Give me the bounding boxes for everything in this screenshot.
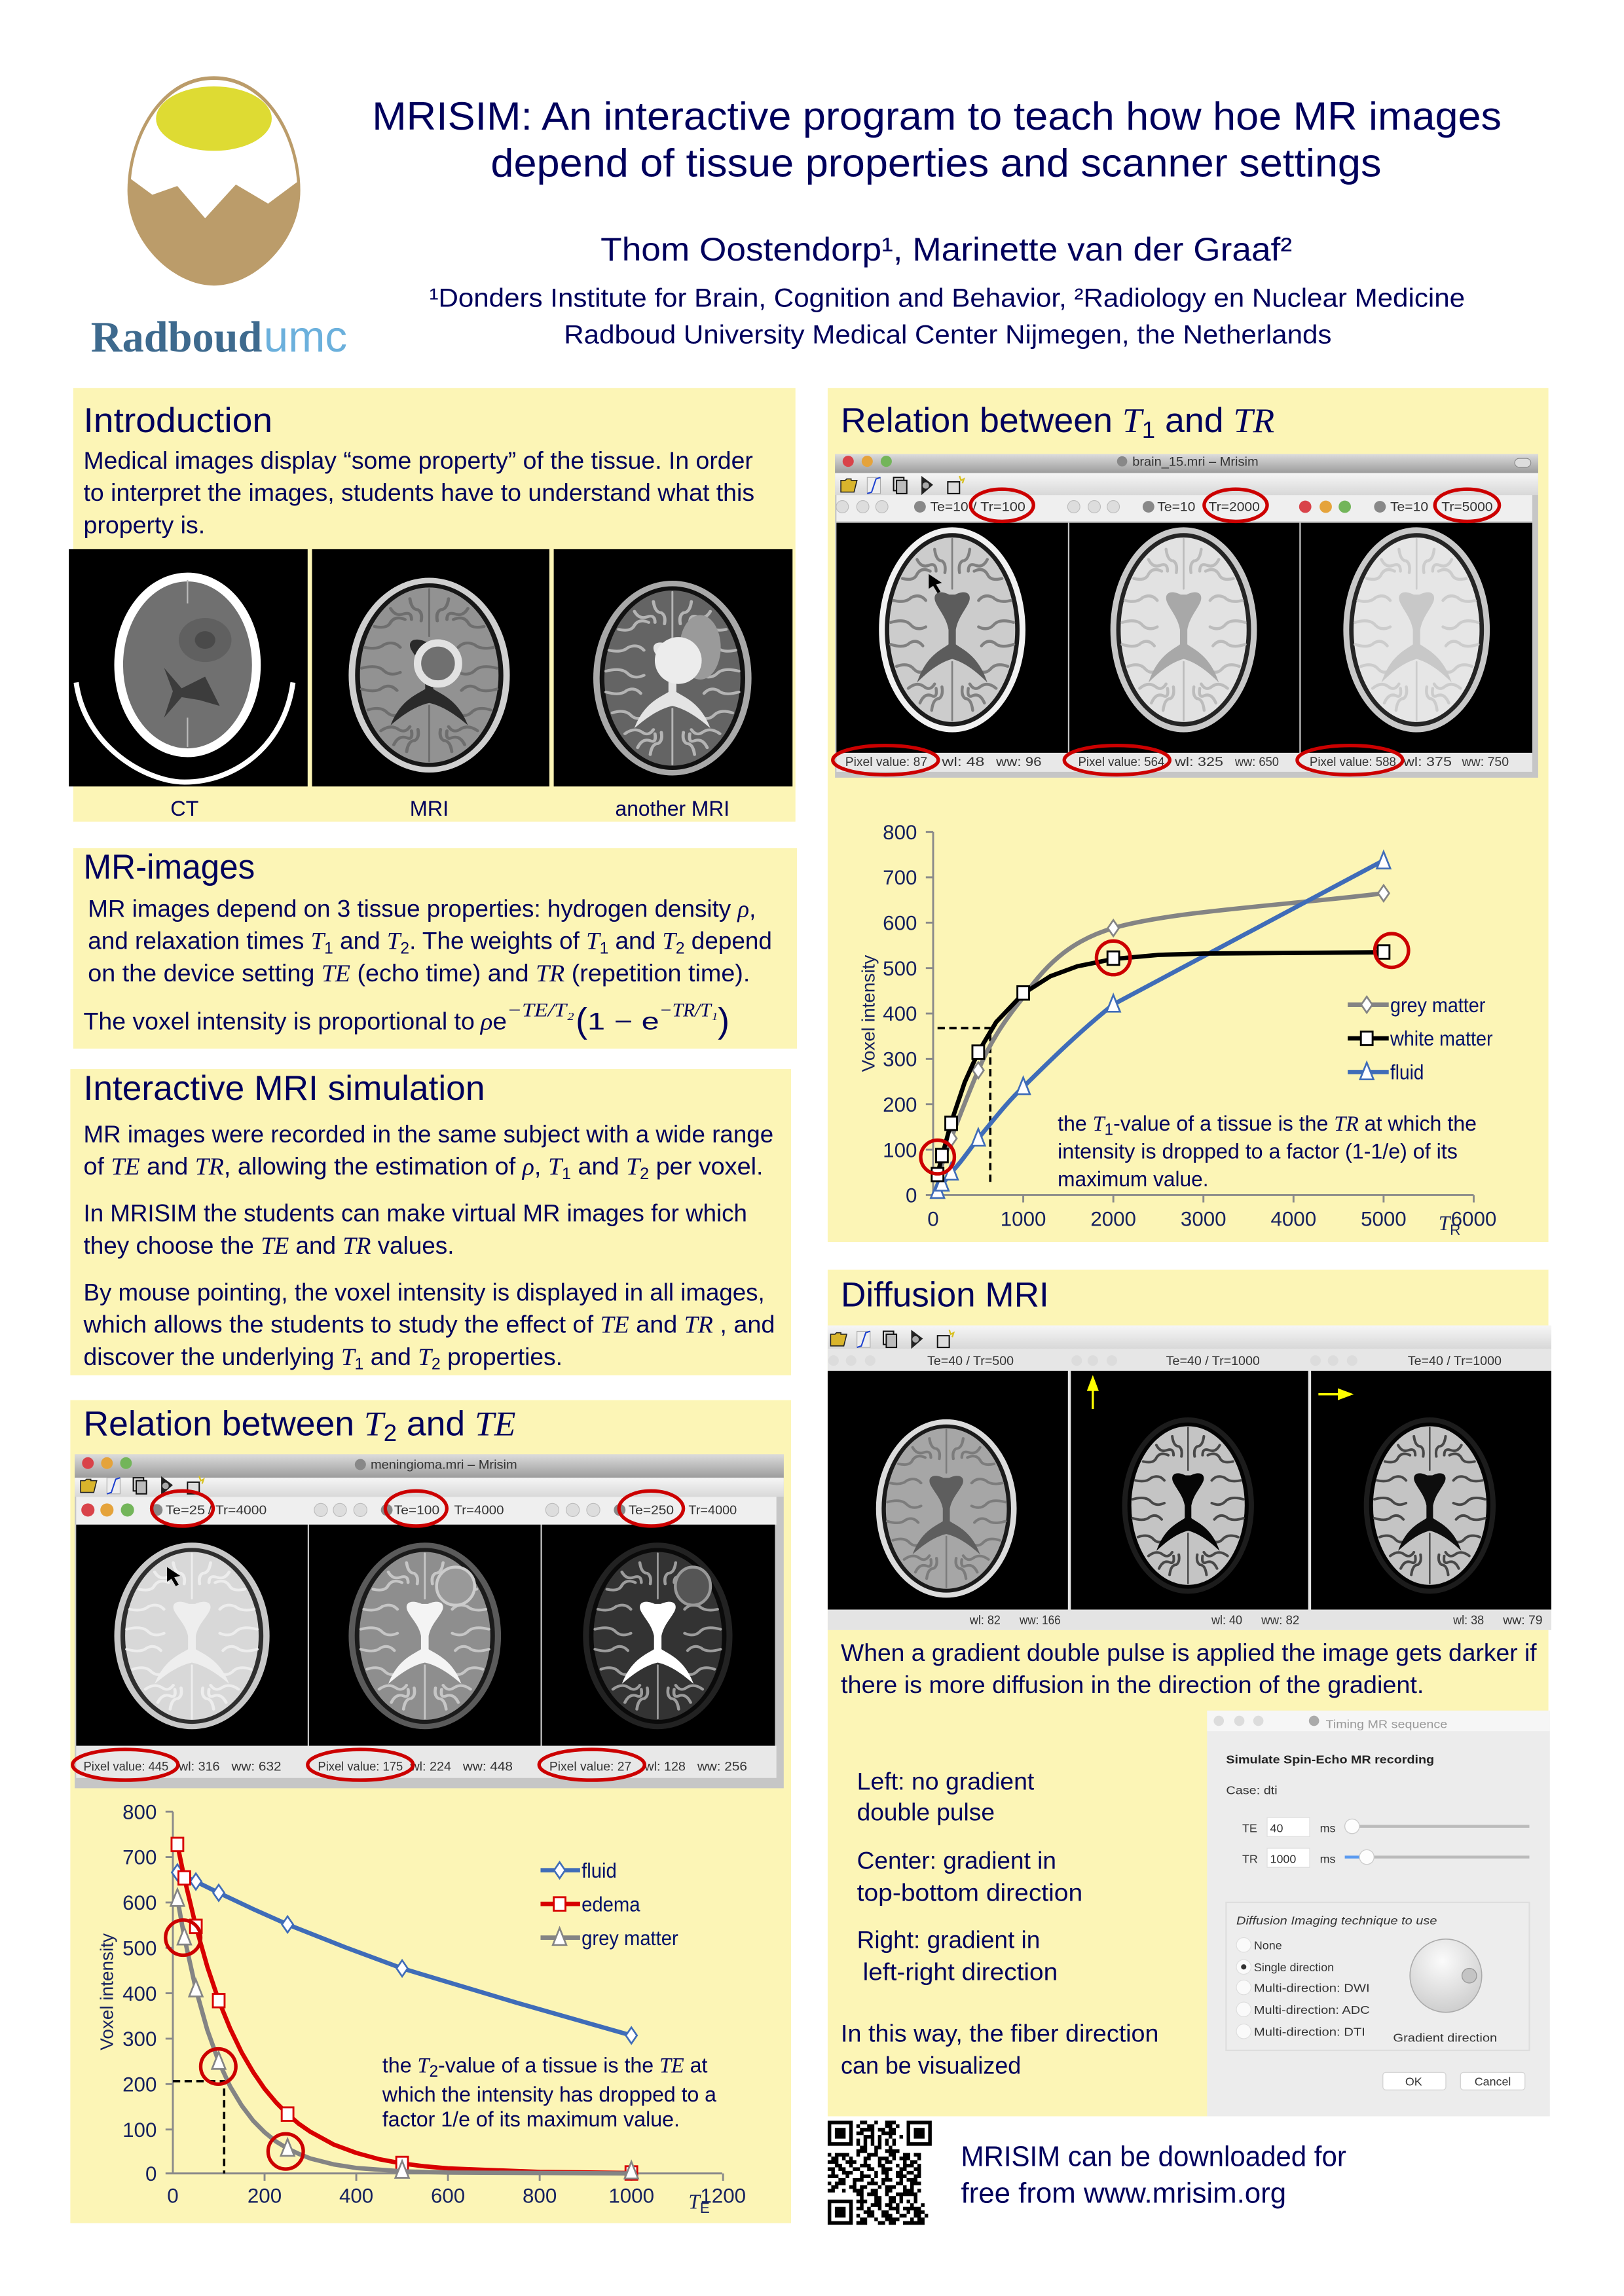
screenshot: brain_15 window: Te=10 [1390, 501, 1428, 515]
dialog: timing MR sequence: Cancel [1475, 2075, 1511, 2088]
text: MR-images body: and [333, 928, 387, 955]
dashed guide [938, 1028, 990, 1184]
screenshot: brain_15 window: brain_15.mri – Mrisim [1132, 455, 1259, 469]
legend: grey matter [581, 1927, 678, 1950]
axis labels: 0 [145, 2162, 157, 2185]
axis labels [858, 821, 1496, 1238]
screenshot: meningioma window: Tr=4000 [688, 1504, 737, 1518]
annotation: T2 definition [382, 2053, 717, 2131]
text: MR-images body [88, 895, 772, 987]
annotation: T2 definition: TE at [659, 2053, 708, 2077]
screenshot: brain_15 window: ww: 750 [1462, 756, 1509, 769]
legend [540, 1859, 678, 1950]
annotation: T1 definition: 1 [1105, 1121, 1113, 1139]
logo: Radboud egg [91, 76, 347, 361]
text: MR-images body: 2 [400, 939, 409, 957]
text: left center right descriptions: left-right direction [863, 1958, 1058, 1985]
text: introduction body [84, 447, 754, 538]
panel: MR-images [73, 848, 797, 1049]
axis labels: 700 [883, 866, 917, 889]
heading: relation T2 TE: and [397, 1404, 475, 1443]
text: left center right descriptions: Center: gradient in [857, 1847, 1056, 1874]
captions [170, 797, 729, 820]
screenshot: meningioma window: ww: 256 [697, 1760, 747, 1774]
dialog: timing MR sequence: Diffusion Imaging technique to use [1236, 1914, 1437, 1927]
axis labels: 6000 [1451, 1207, 1496, 1230]
text: MR-images body: depend [685, 928, 772, 955]
text: MR-images body: T [662, 928, 677, 955]
text: left center right descriptions [841, 1768, 1159, 2079]
screenshot: brain_15 window: Tr=5000 [1441, 501, 1493, 515]
axis labels: T [1439, 1212, 1450, 1235]
screenshot: diffusion window: ww: 79 [1502, 1614, 1543, 1628]
annotation: T1 definition: the T [1058, 1112, 1105, 1136]
text: interactive body: 2 [640, 1165, 649, 1183]
captions: another MRI [616, 797, 729, 820]
heading: relation T1 TR: and [1155, 401, 1234, 440]
text: MR-images body: on the device setting TE (echo time) and TR (repetition time). [88, 960, 750, 987]
axis labels: 200 [122, 2073, 157, 2096]
affiliations: Radboud University Medical Center Nijmegen, the Netherlands [564, 320, 1331, 350]
panel: relation between T1 and TR [828, 388, 1549, 1242]
screenshot: brain_15 window: Pixel value: 588 [1310, 756, 1396, 769]
text: left center right descriptions: top-bottom direction [857, 1880, 1082, 1906]
screenshot: diffusion window: ww: 82 [1261, 1614, 1299, 1628]
annotation: T2 definition: 2 [429, 2063, 438, 2081]
panel: interactive MRI simulation [70, 1069, 791, 1376]
screenshot: brain_15 window: wl: 375 [1403, 756, 1452, 769]
heading: MR-images: MR-images [84, 848, 255, 886]
image: MRI T2 [554, 549, 792, 786]
text: download note: MRISIM can be downloaded for [961, 2141, 1346, 2173]
axis labels: R [1450, 1222, 1460, 1238]
dialog: timing MR sequence: Single direction [1254, 1961, 1334, 1974]
text: interactive body: discover the underlying T [84, 1343, 354, 1370]
authors: Thom Oostendorp¹, Marinette van der Graaf² [600, 230, 1292, 268]
screenshot: brain_15 window: Te=10 [1157, 501, 1195, 515]
formula: voxel intensity: ( [576, 1001, 587, 1040]
screenshot: diffusion window: wl: 82 [969, 1614, 1001, 1628]
text: left center right descriptions: double pulse [857, 1799, 995, 1826]
screenshot: meningioma window: / Tr=4000 [208, 1504, 267, 1518]
axis labels: 800 [883, 821, 917, 844]
formula: voxel intensity: ρe [480, 1008, 507, 1035]
text: interactive body: In MRISIM the students can make virtual MR images for which [84, 1200, 747, 1227]
text: left center right descriptions: In this way, the fiber direction [841, 2020, 1159, 2047]
dialog: timing MR sequence: ms [1320, 1822, 1335, 1835]
text: interactive body: 2 [432, 1356, 441, 1374]
text: interactive body [83, 1121, 775, 1374]
axis labels: 2000 [1090, 1207, 1136, 1230]
axis labels: 1200 [700, 2185, 746, 2208]
text: interactive body: per voxel. [649, 1153, 764, 1180]
dialog: timing MR sequence [1207, 1711, 1550, 2117]
dialog: timing MR sequence: None [1254, 1939, 1282, 1952]
annotation: T1 definition: maximum value. [1058, 1167, 1209, 1191]
dialog: timing MR sequence: 1000 [1270, 1853, 1296, 1866]
series: grey matter [938, 885, 1389, 1177]
text: MR-images body: 1 [324, 939, 333, 957]
text: interactive body: MR images were recorded in the same subject with a wide range [84, 1121, 773, 1148]
callouts: red ellipses on T2 window [73, 1491, 684, 1780]
axis labels: T [688, 2190, 700, 2213]
text: diffusion explanation: there is more diffusion in the direction of the gradient. [841, 1671, 1424, 1698]
annotation: T1 definition [1058, 1112, 1477, 1191]
axes [166, 1812, 723, 2181]
annotation: T2 definition: factor 1/e of its maximum value. [382, 2107, 680, 2131]
axis labels: 400 [339, 2185, 373, 2208]
screenshot: meningioma window: ww: 448 [462, 1760, 513, 1774]
text: interactive body: properties. [441, 1343, 563, 1370]
affiliations [429, 283, 1465, 350]
axis labels: 600 [122, 1891, 157, 1914]
heading: diffusion MRI: Diffusion MRI [841, 1275, 1049, 1314]
panel: relation between T2 and TE [70, 1400, 791, 2223]
text: interactive body: T [418, 1343, 433, 1370]
axis labels: 0 [906, 1184, 917, 1207]
dialog: timing MR sequence: Multi-direction: DTI [1254, 2025, 1365, 2038]
text: interactive body: and [571, 1153, 626, 1180]
heading: relation T1 TR: TR [1234, 402, 1274, 440]
panel: introduction [69, 388, 796, 822]
text: left center right descriptions: can be visualized [841, 2052, 1021, 2079]
chart: voxel intensity versus TR [858, 821, 1496, 1238]
axis labels: 800 [523, 2185, 557, 2208]
icon: yellow right arrow [1318, 1390, 1351, 1398]
screenshot: brain_15 window: wl: 48 [941, 756, 984, 769]
text: MR-images body: T [387, 928, 402, 955]
title [372, 94, 1502, 185]
series: fluid [172, 1865, 637, 2043]
affiliations: ¹Donders Institute for Brain, Cognition and Behavior, ²Radiology en Nuclear Medicine [429, 283, 1465, 313]
text: interactive body: T [626, 1153, 642, 1180]
axis labels: 600 [883, 912, 917, 935]
screenshot: diffusion window: wl: 40 [1211, 1614, 1242, 1628]
text: MR-images body: MR images depend on 3 tissue properties: hydrogen density ρ, [88, 895, 756, 922]
text: interactive body: which allows the students to study the effect of TE and TR , and [83, 1311, 775, 1338]
axis labels: 200 [248, 2185, 282, 2208]
dialog: timing MR sequence: ms [1320, 1853, 1335, 1866]
screenshot: meningioma window: wl: 128 [644, 1760, 686, 1774]
title: depend of tissue properties and scanner settings [490, 141, 1382, 185]
formula: voxel intensity: −TE/T₂ [507, 1000, 574, 1021]
formula: voxel intensity: 1 − e [587, 1008, 659, 1035]
axis labels: 0 [167, 2185, 179, 2208]
QR code [828, 2123, 930, 2223]
dialog: timing MR sequence: Timing MR sequence [1326, 1718, 1447, 1731]
icon: yellow up arrow [1088, 1378, 1098, 1409]
axis labels: 800 [122, 1800, 157, 1823]
legend: fluid [581, 1859, 617, 1882]
screenshot: diffusion window: ww: 166 [1019, 1614, 1061, 1628]
image: CT scan [69, 549, 308, 786]
callouts: red circles on T2 curve [166, 1920, 303, 2169]
heading: introduction: Introduction [84, 401, 272, 440]
axis labels: 1000 [608, 2185, 654, 2208]
series: white matter [932, 945, 1390, 1181]
formula: voxel intensity [84, 1000, 729, 1040]
text: interactive body: 1 [355, 1356, 363, 1374]
heading: relation T1 TR: 1 [1142, 417, 1155, 443]
axis labels: 500 [122, 1937, 157, 1959]
screenshot: diffusion window: wl: 38 [1452, 1614, 1484, 1628]
axis labels: 400 [122, 1982, 157, 2005]
screenshot: meningioma window: Te=100 [394, 1504, 439, 1518]
screenshot: brain_15 window: Pixel value: 564 [1078, 756, 1165, 769]
text: interactive body: and [363, 1343, 418, 1370]
screenshot: diffusion window: Te=40 / Tr=1000 [1166, 1355, 1260, 1368]
heading: relation T2 TE: Relation between T [84, 1404, 383, 1443]
legend: white matter [1390, 1027, 1493, 1050]
title: MRISIM: An interactive program to teach how hoe MR images [372, 94, 1502, 138]
text: MR-images body: . The weights of [409, 928, 586, 955]
formula: voxel intensity: The voxel intensity is proportional to [84, 1008, 475, 1035]
axis labels: 200 [883, 1093, 917, 1116]
legend [1348, 994, 1493, 1084]
heading: interactive MRI simulation: Interactive MRI simulation [84, 1069, 485, 1108]
screenshot: meningioma window: Pixel value: 175 [318, 1760, 403, 1774]
series: grey matter [171, 1889, 638, 2179]
formula: voxel intensity: ) [718, 1001, 729, 1040]
text: download note: free from www.mrisim.org [961, 2178, 1286, 2210]
chart: voxel intensity versus TE [96, 1800, 746, 2216]
text: introduction body: property is. [84, 511, 205, 538]
dialog: timing MR sequence: TR [1242, 1853, 1258, 1866]
text: diffusion explanation [841, 1639, 1537, 1698]
text: download note [961, 2141, 1346, 2210]
axis labels: 1000 [1001, 1207, 1046, 1230]
annotation: T1 definition: -value of a tissue is the [1113, 1112, 1334, 1135]
screenshot: brain_15 window: / Tr=100 [972, 501, 1025, 515]
screenshot: diffusion window: Te=40 / Tr=1000 [1408, 1355, 1502, 1368]
axis labels: 5000 [1361, 1207, 1407, 1230]
series: edema [172, 1838, 637, 2179]
logo: Radboud egg: Radboud [91, 312, 262, 361]
callouts: red circles on T1 curve [921, 934, 1409, 1174]
screenshot: brain_15 window: ww: 96 [995, 756, 1042, 769]
heading: relation T1 TR: Relation between T [841, 401, 1141, 440]
legend: edema [581, 1893, 640, 1916]
axes [926, 832, 1473, 1203]
dialog: timing MR sequence: Simulate Spin-Echo MR recording [1226, 1753, 1434, 1766]
screenshot: meningioma window: wl: 224 [409, 1760, 451, 1774]
axis labels: 100 [883, 1139, 917, 1161]
heading: relation T2 TE: TE [475, 1405, 515, 1443]
legend: grey matter [1390, 994, 1485, 1017]
dialog: timing MR sequence: Gradient direction [1393, 2031, 1497, 2044]
annotation: T1 definition: intensity is dropped to a factor (1-1/e) of its [1058, 1139, 1458, 1163]
dialog: timing MR sequence: OK [1405, 2075, 1422, 2088]
screenshot: brain_15 window: Pixel value: 87 [845, 756, 927, 769]
screenshot: meningioma window: wl: 316 [178, 1760, 220, 1774]
heading: relation T2 TE: 2 [384, 1420, 397, 1446]
text: MR-images body: T [586, 928, 601, 955]
annotation: T2 definition: -value of a tissue is the [438, 2053, 659, 2077]
dialog: timing MR sequence: Case: dti [1226, 1783, 1278, 1796]
logo: Radboud egg: umc [264, 312, 347, 361]
axis labels: 3000 [1181, 1207, 1227, 1230]
image: MRI T1 [312, 549, 549, 786]
text: left center right descriptions: Right: gradient in [857, 1926, 1040, 1953]
axis labels: Voxel intensity [96, 1933, 117, 2050]
formula: voxel intensity: −TR/T₁ [659, 1000, 718, 1021]
text: introduction body: Medical images display “some property” of the tissue. In order [84, 447, 753, 474]
screenshot: brain_15 window: Tr=2000 [1209, 501, 1260, 515]
axis labels: 300 [122, 2028, 157, 2050]
axis labels: E [700, 2200, 710, 2216]
panel: diffusion MRI [828, 1270, 1551, 2117]
axis labels: 0 [927, 1207, 939, 1230]
screenshot: brain_15 window: ww: 650 [1234, 756, 1279, 769]
screenshot: meningioma window: Tr=4000 [454, 1504, 504, 1518]
text: left center right descriptions: Left: no gradient [857, 1768, 1034, 1795]
screenshot: brain_15 window: wl: 325 [1174, 756, 1223, 769]
dashed guide [173, 2081, 224, 2174]
callouts: red ellipses on T1 window [833, 489, 1500, 774]
legend: fluid [1390, 1061, 1424, 1084]
text: interactive body: 1 [562, 1165, 571, 1183]
screenshot: diffusion window: Te=40 / Tr=500 [927, 1355, 1014, 1368]
screenshot: meningioma window: Pixel value: 27 [549, 1760, 631, 1774]
axis labels [96, 1800, 746, 2216]
screenshot: brain_15 window [835, 454, 1538, 778]
axis labels: 100 [122, 2119, 157, 2141]
annotation: T2 definition: the T [382, 2053, 430, 2077]
dialog: timing MR sequence: TE [1242, 1822, 1257, 1835]
text: MR-images body: and [608, 928, 662, 955]
text: MR-images body: 2 [676, 939, 685, 957]
screenshot: meningioma window [75, 1454, 784, 1788]
screenshot: brain_15 window: Te=10 [931, 501, 969, 515]
text: MR-images body: and relaxation times T [88, 928, 324, 955]
dialog: timing MR sequence: 40 [1270, 1822, 1283, 1835]
axis labels: 400 [883, 1002, 917, 1025]
text: MR-images body: 1 [600, 939, 608, 957]
text: interactive body: they choose the TE and TR values. [84, 1232, 454, 1259]
dialog: timing MR sequence: Multi-direction: ADC [1254, 2003, 1370, 2016]
axis labels: 4000 [1271, 1207, 1316, 1230]
axis labels: 600 [431, 2185, 465, 2208]
text: diffusion explanation: When a gradient double pulse is applied the image gets darker if [841, 1639, 1537, 1666]
dialog: timing MR sequence: Multi-direction: DWI [1254, 1981, 1370, 1994]
text: introduction body: to interpret the images, students have to understand what this [84, 479, 754, 506]
text: interactive body: By mouse pointing, the voxel intensity is displayed in all images, [84, 1279, 765, 1305]
axis labels: 700 [122, 1846, 157, 1869]
axis labels: Voxel intensity [858, 955, 879, 1072]
captions: CT [170, 797, 199, 820]
screenshot: diffusion window [828, 1326, 1551, 1630]
captions: MRI [410, 797, 449, 820]
text: interactive body: of TE and TR, allowing the estimation of ρ, T [84, 1153, 561, 1180]
screenshot: meningioma window: Pixel value: 445 [84, 1760, 168, 1774]
annotation: T1 definition: TR at which the [1334, 1112, 1478, 1136]
screenshot: meningioma window: Te=250 [629, 1504, 674, 1518]
axis labels: 300 [883, 1048, 917, 1071]
screenshot: meningioma window: Te=25 [166, 1504, 205, 1518]
series: fluid [931, 852, 1390, 1198]
axis labels: 500 [883, 957, 917, 980]
screenshot: meningioma window: ww: 632 [231, 1760, 282, 1774]
screenshot: meningioma window: meningioma.mri – Mrisim [371, 1459, 517, 1472]
annotation: T2 definition: which the intensity has dropped to a [382, 2083, 717, 2106]
